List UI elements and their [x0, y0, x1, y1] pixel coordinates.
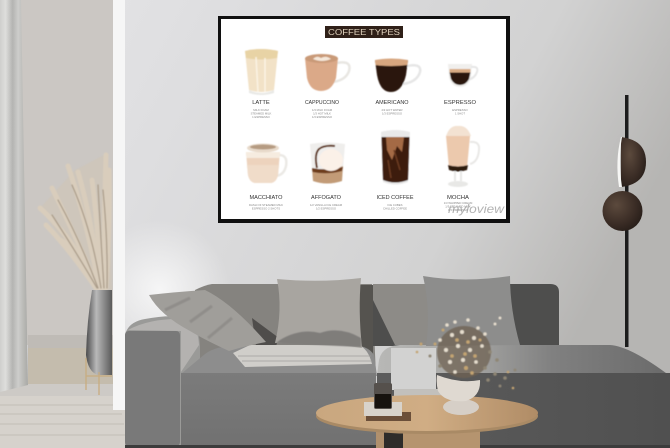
label: mocha: 1/3 ESPRESSO: [448, 208, 469, 212]
label: espresso: ESPRESSO: [452, 108, 469, 112]
label: cappuccino: 1/3 HOT MILK: [313, 112, 331, 116]
sunlight glow on wall: [90, 220, 230, 360]
watermark: myloview: [448, 202, 506, 216]
label: cappuccino: 1/3 MILK FOAM: [312, 108, 333, 112]
sofa seat left front: [181, 373, 376, 446]
cup: espresso: [448, 64, 477, 87]
cup: cappuccino: [305, 54, 350, 91]
pillow left: [149, 290, 266, 351]
cup: americano: [375, 58, 420, 92]
coffee table: [316, 383, 538, 448]
label: mocha: 1/3 WHIPPED CREAM: [444, 201, 473, 205]
cup: affogato: [310, 142, 345, 184]
label: latte: MILK FOAM: [253, 108, 269, 112]
floor lamp: [602, 95, 646, 347]
poster paper: [221, 19, 506, 219]
label: cappuccino: CAPPUCCINO: [305, 100, 339, 106]
poster title: [325, 26, 403, 38]
poster: [218, 16, 510, 223]
label: americano: 1/3 ESPRESSO: [382, 112, 403, 116]
label: latte: LATTE: [252, 100, 270, 106]
label: latte: STEAMED MILK: [251, 112, 272, 116]
label: mocha: [444, 195, 473, 212]
left adjoining room: [0, 0, 126, 448]
plant: pampas grass: [40, 153, 112, 290]
flower pot: [437, 375, 480, 415]
label: macchiato: ESPRESSO 2 SHOTS: [252, 206, 280, 210]
lamp upper shade: [621, 137, 646, 187]
sofa left arm: [125, 316, 200, 446]
label: espresso: 1 SHOT: [455, 112, 465, 116]
label: mocha: 1/3 STEAMED MILK: [445, 204, 471, 208]
poster frame: [218, 16, 510, 223]
label: latte: 1 ESPRESSO: [252, 115, 271, 119]
poster title: COFFEE TYPES: [328, 27, 400, 37]
label: americano: [376, 100, 409, 116]
sofa seat right top: [377, 345, 670, 376]
sofa back right: [373, 284, 559, 346]
label: iced coffee: ICED COFFEE: [376, 195, 414, 201]
curtain: [0, 0, 28, 392]
label: macchiato: DASH OF STEAMED MILK: [249, 203, 283, 207]
books on sofa: [391, 348, 444, 405]
cup: mocha: [446, 126, 479, 187]
label: americano: AMERICANO: [376, 100, 409, 106]
sofa: [125, 276, 670, 448]
label: affogato: 1/2 VANILLA ICE CREAM: [310, 203, 343, 207]
pillow right: [423, 276, 520, 346]
lamp lower globe: [602, 191, 642, 231]
label: espresso: [444, 100, 476, 116]
label: affogato: [310, 195, 343, 210]
label: affogato: AFFOGATO: [311, 195, 341, 201]
label: cappuccino: 1/3 ESPRESSO: [312, 115, 333, 119]
label: affogato: 1/2 ESPRESSO: [316, 206, 337, 210]
label: iced coffee: [376, 195, 414, 210]
label: mocha: MOCHA: [447, 195, 469, 201]
sofa seat left top: [181, 345, 377, 376]
cup: latte: [245, 49, 278, 95]
sofa back left: [195, 284, 376, 376]
label: iced coffee: ICE CUBES: [387, 203, 403, 207]
label: cappuccino: [305, 100, 339, 119]
sofa seat right front: [377, 373, 670, 446]
dried flowers: [416, 316, 516, 389]
wall corner highlight: [113, 0, 125, 410]
label: macchiato: [249, 195, 283, 210]
label: iced coffee: CHILLED COFFEE: [383, 206, 407, 210]
cup: macchiato: [246, 144, 286, 183]
seat sun patch: [233, 345, 372, 367]
vase with stand: [86, 290, 112, 395]
label: espresso: ESPRESSO: [444, 100, 476, 106]
pillow centre: [275, 278, 362, 348]
label: macchiato: MACCHIATO: [250, 195, 283, 201]
tray with glass: [364, 383, 411, 421]
label: americano: 2/3 HOT WATER: [381, 108, 403, 112]
label: latte: [251, 100, 272, 119]
cup: iced coffee: [381, 130, 410, 184]
